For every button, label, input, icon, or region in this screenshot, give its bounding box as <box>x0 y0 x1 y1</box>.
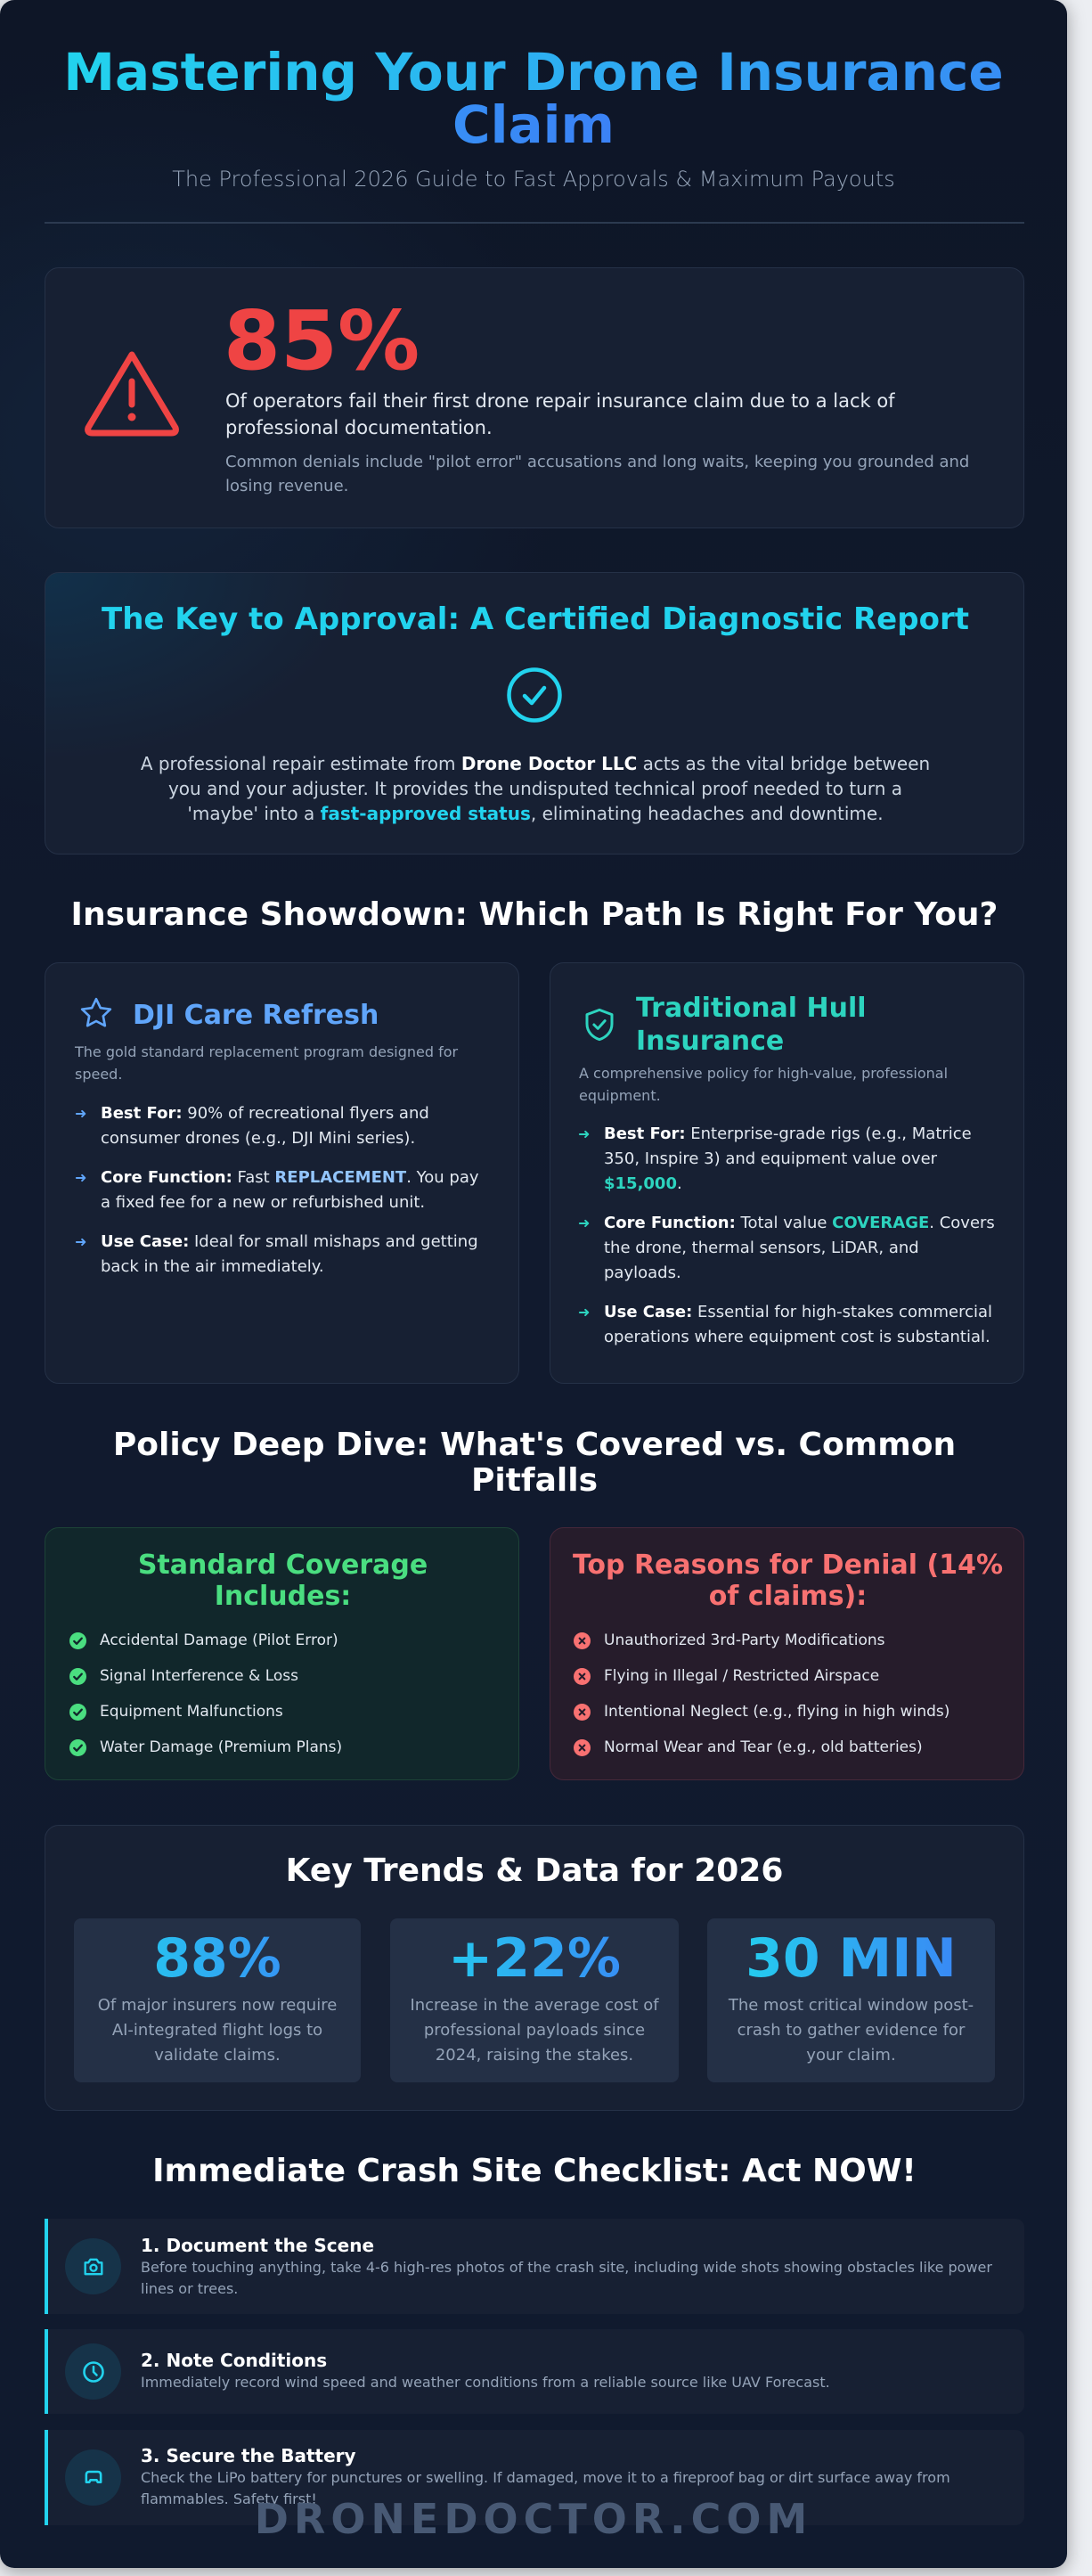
panel: DJI Care Refresh: ➜ <box>75 1169 86 1186</box>
stat box: 30 MIN: 30 MIN <box>746 1927 957 1990</box>
bullet list: Use Case: Essential for high-stakes commercial <box>604 1303 992 1321</box>
panel: standard coverage <box>45 1527 519 1780</box>
panel: Traditional Hull Insurance: ➜ <box>578 1214 590 1231</box>
card title <box>573 1550 1003 1612</box>
bullet list <box>75 1104 479 1276</box>
bullet list: payloads. <box>604 1263 681 1282</box>
bullet list <box>578 1124 995 1346</box>
panel: DJI Care Refresh <box>45 962 519 1384</box>
icon: clock <box>65 2343 121 2400</box>
panel: key trends <box>45 1825 1024 2111</box>
bullet list: consumer drones (e.g., DJI Mini series). <box>101 1128 415 1148</box>
coverage list: Water Damage (Premium Plans) <box>100 1738 342 1756</box>
panel: key to approval <box>45 572 1024 855</box>
stat box: +22% <box>390 1918 679 2082</box>
panel: DJI Care Refresh: ➜ <box>75 1105 86 1122</box>
big stat 85%: 85% <box>224 293 420 388</box>
stat note: losing revenue. <box>225 477 348 495</box>
watermark: DRONEDOCTOR.COM <box>255 2495 812 2543</box>
panel: Traditional Hull Insurance: ➜ <box>578 1125 590 1142</box>
stat box: 88% <box>74 1918 361 2082</box>
bullet list: a fixed fee for a new or refurbished unit. <box>101 1192 425 1212</box>
title: Claim <box>452 94 615 155</box>
card title: Top Reasons for Denial (14% <box>573 1550 1003 1581</box>
stat box: 88%: 88% <box>153 1927 281 1990</box>
panel: reasons for denial <box>550 1527 1024 1780</box>
heading: insurance showdown: Insurance Showdown: Which Path Is Right For You? <box>71 896 998 933</box>
icon: battery/controller <box>65 2449 121 2506</box>
panel: Traditional Hull Insurance <box>550 962 1024 1384</box>
heading: key trends: Key Trends & Data for 2026 <box>286 1852 783 1889</box>
panel: 85% stat <box>45 267 1024 528</box>
coverage list <box>69 1631 342 1756</box>
bullet list: the drone, thermal sensors, LiDAR, and <box>604 1239 919 1257</box>
card title: Insurance <box>636 1026 784 1057</box>
stat note <box>225 453 969 495</box>
body text: A professional repair estimate from Drone Doctor LLC acts as the vital bridge between <box>141 753 930 774</box>
heading: checklist: Immediate Crash Site Checklist: Act NOW! <box>152 2153 917 2189</box>
coverage list: Signal Interference & Loss <box>100 1667 298 1685</box>
bullet list: Use Case: Ideal for small mishaps and getting <box>101 1232 478 1251</box>
denial list <box>574 1631 949 1756</box>
card title: Standard Coverage <box>138 1550 428 1581</box>
title: Mastering Your Drone Insurance <box>63 42 1004 102</box>
heading: policy deep dive: Pitfalls <box>471 1462 598 1499</box>
bullet list: Best For: 90% of recreational flyers and <box>101 1104 429 1123</box>
checklist item 1: 1. Document the Scene <box>141 2235 374 2256</box>
card desc: The gold standard replacement program designed for speed. <box>75 1043 458 1083</box>
stat box: 30 MIN: The most critical window post-crash to gather evidence for your claim. <box>729 1996 974 2065</box>
body text: you and your adjuster. It provides the undisputed technical proof needed to turn a <box>168 778 902 799</box>
card title <box>138 1550 428 1612</box>
bullet list: operations where equipment cost is substantial. <box>604 1328 990 1346</box>
heading: policy deep dive: Policy Deep Dive: What's Covered vs. Common <box>113 1427 956 1463</box>
coverage list: Accidental Damage (Pilot Error) <box>100 1631 338 1649</box>
checklist item 2: Immediately record wind speed and weather conditions from a reliable source like UAV Forecast. <box>141 2374 830 2391</box>
stat box: 30 MIN <box>707 1918 995 2082</box>
heading: The Key to Approval: A Certified Diagnostic Report <box>102 601 969 637</box>
card desc: A comprehensive policy for high-value, professional equipment. <box>579 1065 948 1104</box>
stat box: +22%: +22% <box>448 1927 621 1990</box>
stat box: 88%: Of major insurers now require AI-integrated flight logs to validate claims. <box>98 1996 337 2065</box>
bullet list: $15,000. <box>604 1174 682 1193</box>
checklist item 1 <box>45 2219 1024 2314</box>
checklist item 2 <box>45 2329 1024 2414</box>
denial list: Flying in Illegal / Restricted Airspace <box>604 1667 879 1685</box>
icon: star <box>80 998 112 1026</box>
card title: Includes: <box>215 1581 351 1612</box>
denial list: Unauthorized 3rd-Party Modifications <box>604 1631 884 1649</box>
bullet list: back in the air immediately. <box>101 1256 324 1276</box>
card title: DJI Care Refresh <box>133 1000 379 1031</box>
denial list: Normal Wear and Tear (e.g., old batteries) <box>604 1738 923 1756</box>
stat box: +22%: Increase in the average cost of professional payloads since 2024, raising the stakes. <box>410 1996 659 2065</box>
stat text: Of operators fail their first drone repair insurance claim due to a lack of professional documentation. <box>225 390 895 438</box>
checklist item 2: 2. Note Conditions <box>141 2350 327 2371</box>
subtitle: The Professional 2026 Guide to Fast Approvals & Maximum Payouts <box>172 167 895 192</box>
stat note: Common denials include "pilot error" accusations and long waits, keeping you grounded and <box>225 453 969 471</box>
panel: DJI Care Refresh: ➜ <box>75 1233 86 1250</box>
card title <box>636 993 867 1057</box>
checklist item 3: 3. Secure the Battery <box>141 2445 356 2466</box>
icon: shield <box>586 1009 613 1041</box>
icon: camera <box>65 2238 121 2294</box>
panel: Traditional Hull Insurance: ➜ <box>578 1304 590 1321</box>
checklist item 1: Before touching anything, take 4-6 high-res photos of the crash site, including wide shots showing obstacles like power lines or trees. <box>141 2259 992 2297</box>
heading: policy deep dive <box>113 1427 956 1499</box>
coverage list: Equipment Malfunctions <box>100 1703 283 1721</box>
bullet list: Core Function: Fast REPLACEMENT. You pay <box>101 1168 479 1187</box>
card title: Traditional Hull <box>636 993 867 1024</box>
bullet list: Best For: Enterprise-grade rigs (e.g., Matrice <box>604 1124 972 1143</box>
checklist item 3: Check the LiPo battery for punctures or swelling. If damaged, move it to a fireproof bag or dirt surface away from flammables. Safety first! <box>141 2469 950 2507</box>
bullet list: Core Function: Total value COVERAGE. Covers <box>604 1214 995 1232</box>
checklist item 3 <box>45 2430 1024 2525</box>
icon: check circle <box>507 667 562 723</box>
body text: 'maybe' into a fast-approved status, eliminating headaches and downtime. <box>187 803 884 824</box>
icon: warning triangle <box>85 351 179 437</box>
bullet list: 350, Inspire 3) and equipment value over <box>604 1149 937 1168</box>
title <box>63 42 1004 155</box>
card title: of claims): <box>709 1581 867 1612</box>
denial list: Intentional Neglect (e.g., flying in high winds) <box>604 1703 949 1721</box>
body text <box>141 753 930 824</box>
